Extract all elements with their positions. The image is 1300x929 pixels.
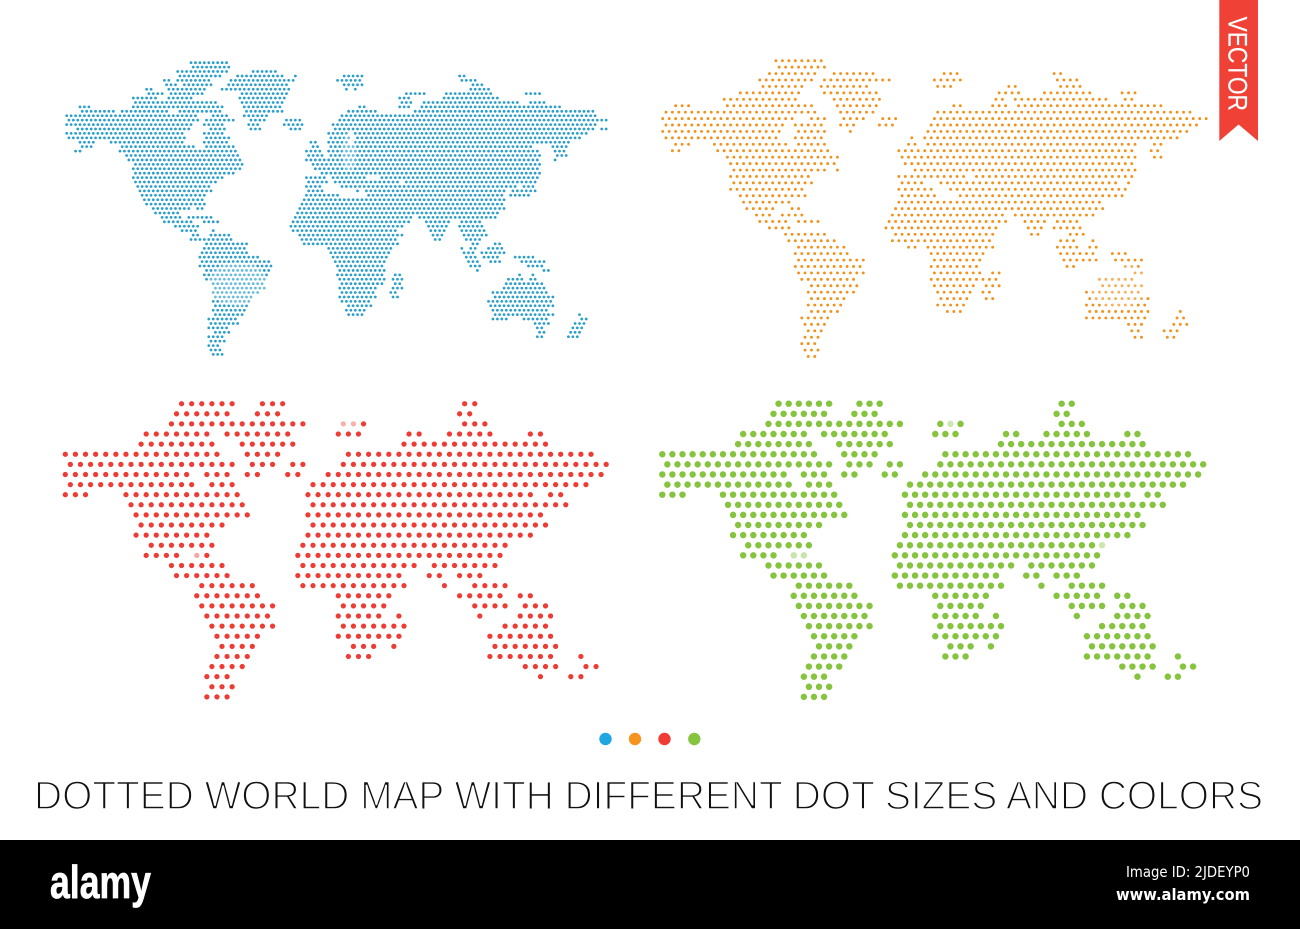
map: orange dotted world map [663,61,1207,356]
footer bar [0,840,1300,929]
map: blue dotted world map (smallest dots) [67,63,607,354]
title: DOTTED WORLD MAP WITH DIFFERENT DOT SIZES AND COLORS [34,774,1263,818]
footer url: www.alamy.com [1116,885,1250,904]
footer logo: alamy [50,856,151,908]
ribbon: VECTOR bookmark badge [1219,0,1258,141]
faded watermark patches over the dots [193,132,1148,560]
map: red dotted world map [65,404,607,697]
footer image id: Image ID: 2JDEYP0 [1126,863,1250,881]
map: green dotted world map (largest dots) [662,404,1204,697]
legend: four colour dots [599,733,700,745]
ribbon: VECTOR bookmark badge: VECTOR [1223,16,1253,111]
